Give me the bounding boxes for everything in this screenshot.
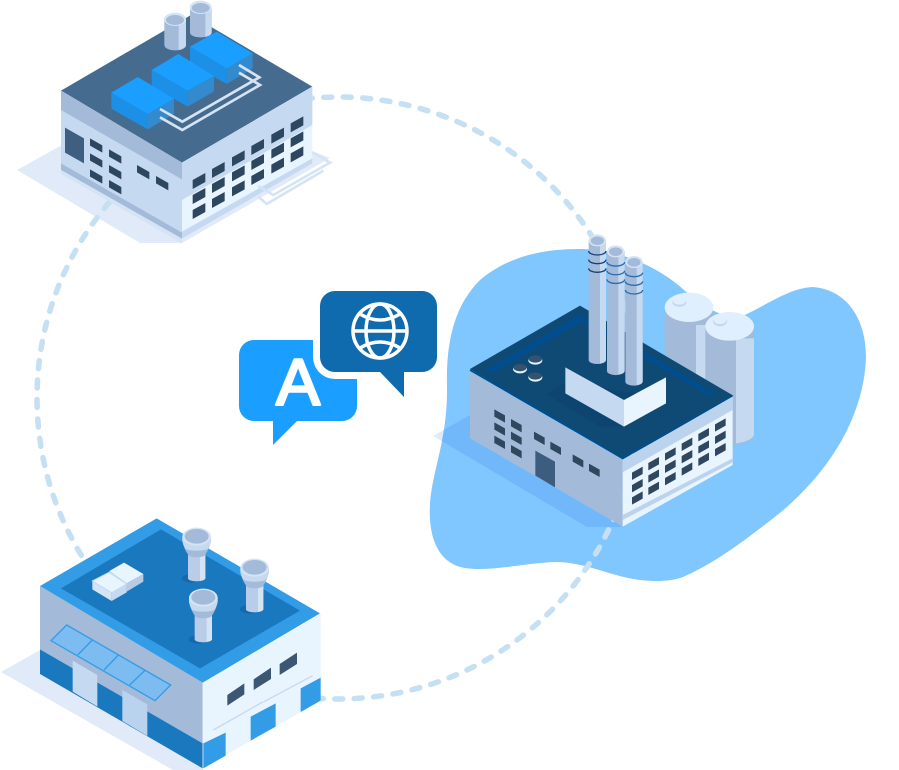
shadow: bottom factory	[1, 650, 203, 770]
left wall	[61, 91, 182, 243]
smokestack	[589, 234, 606, 364]
right wall awning line	[213, 676, 313, 730]
top factory	[61, 1, 330, 243]
smokestack	[607, 245, 625, 375]
shadow: top factory	[17, 100, 330, 243]
right wall windows	[632, 418, 726, 505]
left wall door panel	[65, 128, 84, 163]
right wall	[182, 87, 312, 239]
left wall	[40, 586, 203, 743]
roof	[470, 306, 733, 459]
right wall windows	[193, 116, 303, 219]
right wall windows	[227, 653, 297, 706]
storage tank	[705, 312, 754, 445]
chimney	[182, 528, 211, 583]
roof	[61, 15, 312, 163]
ground duct outline	[258, 152, 330, 204]
right wall	[203, 614, 321, 768]
dashed connection loop	[37, 97, 639, 699]
roof vents	[513, 355, 542, 382]
shadow: main factory ground tip	[433, 415, 623, 527]
door	[535, 451, 555, 487]
main factory	[470, 234, 754, 527]
icon: globe	[353, 304, 407, 358]
roof edge	[40, 518, 320, 683]
rooftop unit	[190, 32, 253, 84]
left wall windows	[90, 138, 168, 194]
chimney	[240, 559, 269, 614]
roof edge highlight	[470, 370, 733, 458]
right wall base panels	[203, 678, 321, 768]
left door	[73, 661, 97, 707]
smokestack	[625, 256, 643, 386]
left wall windows	[494, 409, 600, 477]
rooftop unit	[111, 77, 174, 129]
blue blob backdrop	[430, 249, 866, 581]
light bubble with letter A: A	[276, 345, 320, 419]
solar panels	[51, 625, 171, 701]
chimney	[189, 589, 218, 644]
left wall base band	[40, 649, 203, 768]
roof inner	[61, 529, 300, 668]
white cut-out around dark bubble	[313, 284, 444, 379]
central roof block	[565, 367, 666, 427]
rooftop cylinder	[190, 1, 212, 37]
rooftop cylinder	[164, 13, 186, 50]
storage tank	[665, 293, 713, 412]
rooftop pipes	[160, 65, 260, 130]
left wall	[470, 372, 623, 527]
right wall	[623, 397, 733, 527]
roof raised area	[547, 382, 663, 427]
rooftop boxes	[92, 563, 143, 601]
rooftop unit	[152, 54, 214, 107]
bottom factory	[40, 518, 321, 768]
roof inner strip	[485, 314, 717, 397]
light bubble with letter A	[239, 340, 357, 445]
left door	[122, 690, 147, 736]
shadow: main factory on blob	[433, 415, 623, 527]
dark bubble	[320, 291, 437, 397]
translation icon: speech bubbles	[239, 284, 444, 445]
